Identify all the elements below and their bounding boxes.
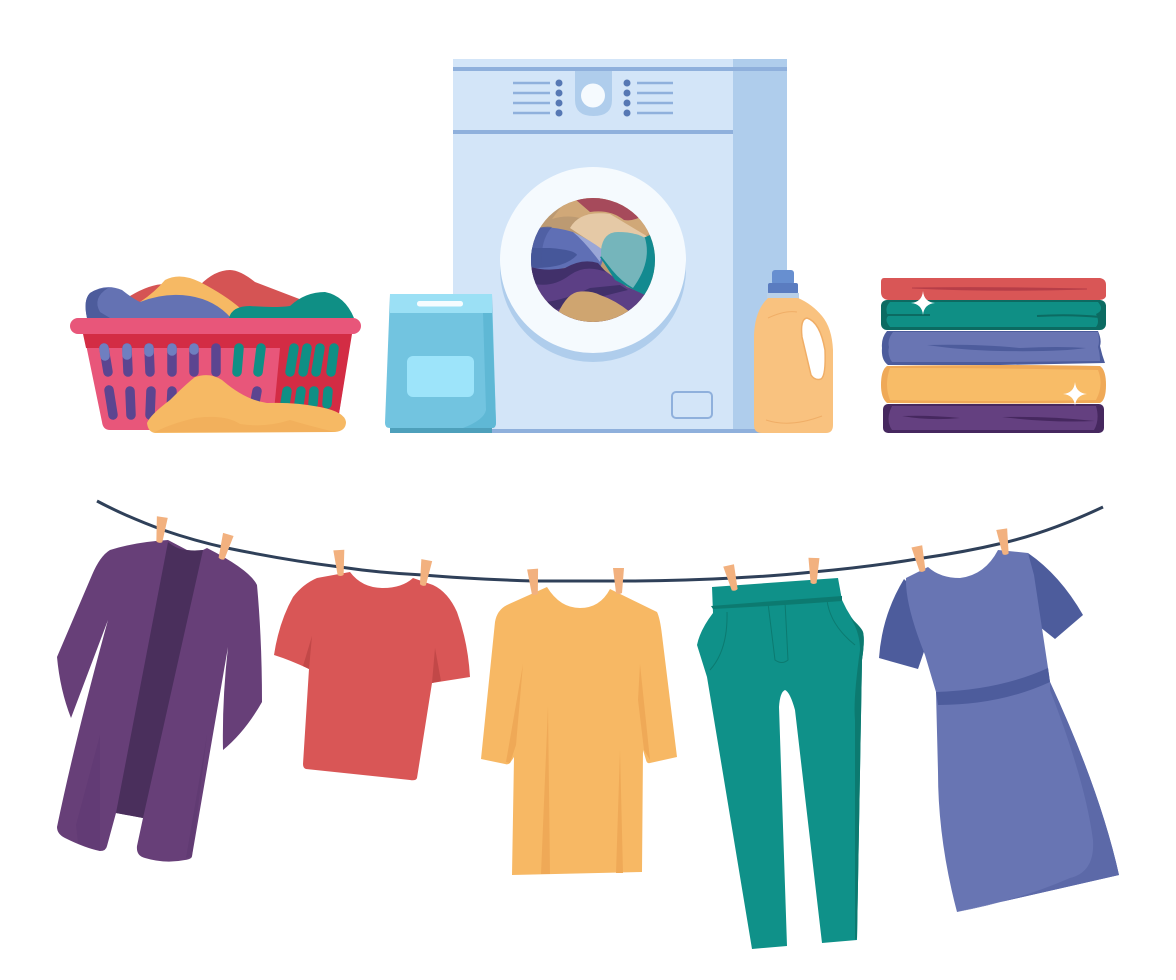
yellow clothes pile (147, 375, 346, 433)
washing machine (453, 59, 787, 433)
detergent powder bag (385, 294, 496, 433)
sparkles (911, 291, 1087, 406)
detergent bottle (754, 270, 833, 433)
washer small hatch (672, 392, 712, 418)
washer door with clothes inside (500, 167, 686, 362)
folded purple towel (883, 404, 1104, 433)
folded yellow towel (881, 365, 1106, 404)
folded red towel (881, 278, 1106, 300)
basket rim (70, 318, 361, 334)
laundry basket with dirty clothes (70, 270, 361, 433)
purple robe (57, 540, 262, 862)
teal trousers (697, 578, 864, 949)
basket slots (104, 348, 334, 415)
folded green towel (881, 300, 1106, 330)
red t-shirt (274, 572, 470, 780)
yellow shirt (481, 587, 677, 875)
folded clothes stack (881, 278, 1106, 433)
basket body (70, 318, 361, 432)
clothesline rope (97, 501, 1103, 581)
folded blue towel (882, 331, 1105, 365)
clothes in basket (86, 270, 354, 320)
washer control panel (513, 71, 673, 116)
clothespins (153, 516, 1011, 595)
blue dress (879, 550, 1119, 912)
